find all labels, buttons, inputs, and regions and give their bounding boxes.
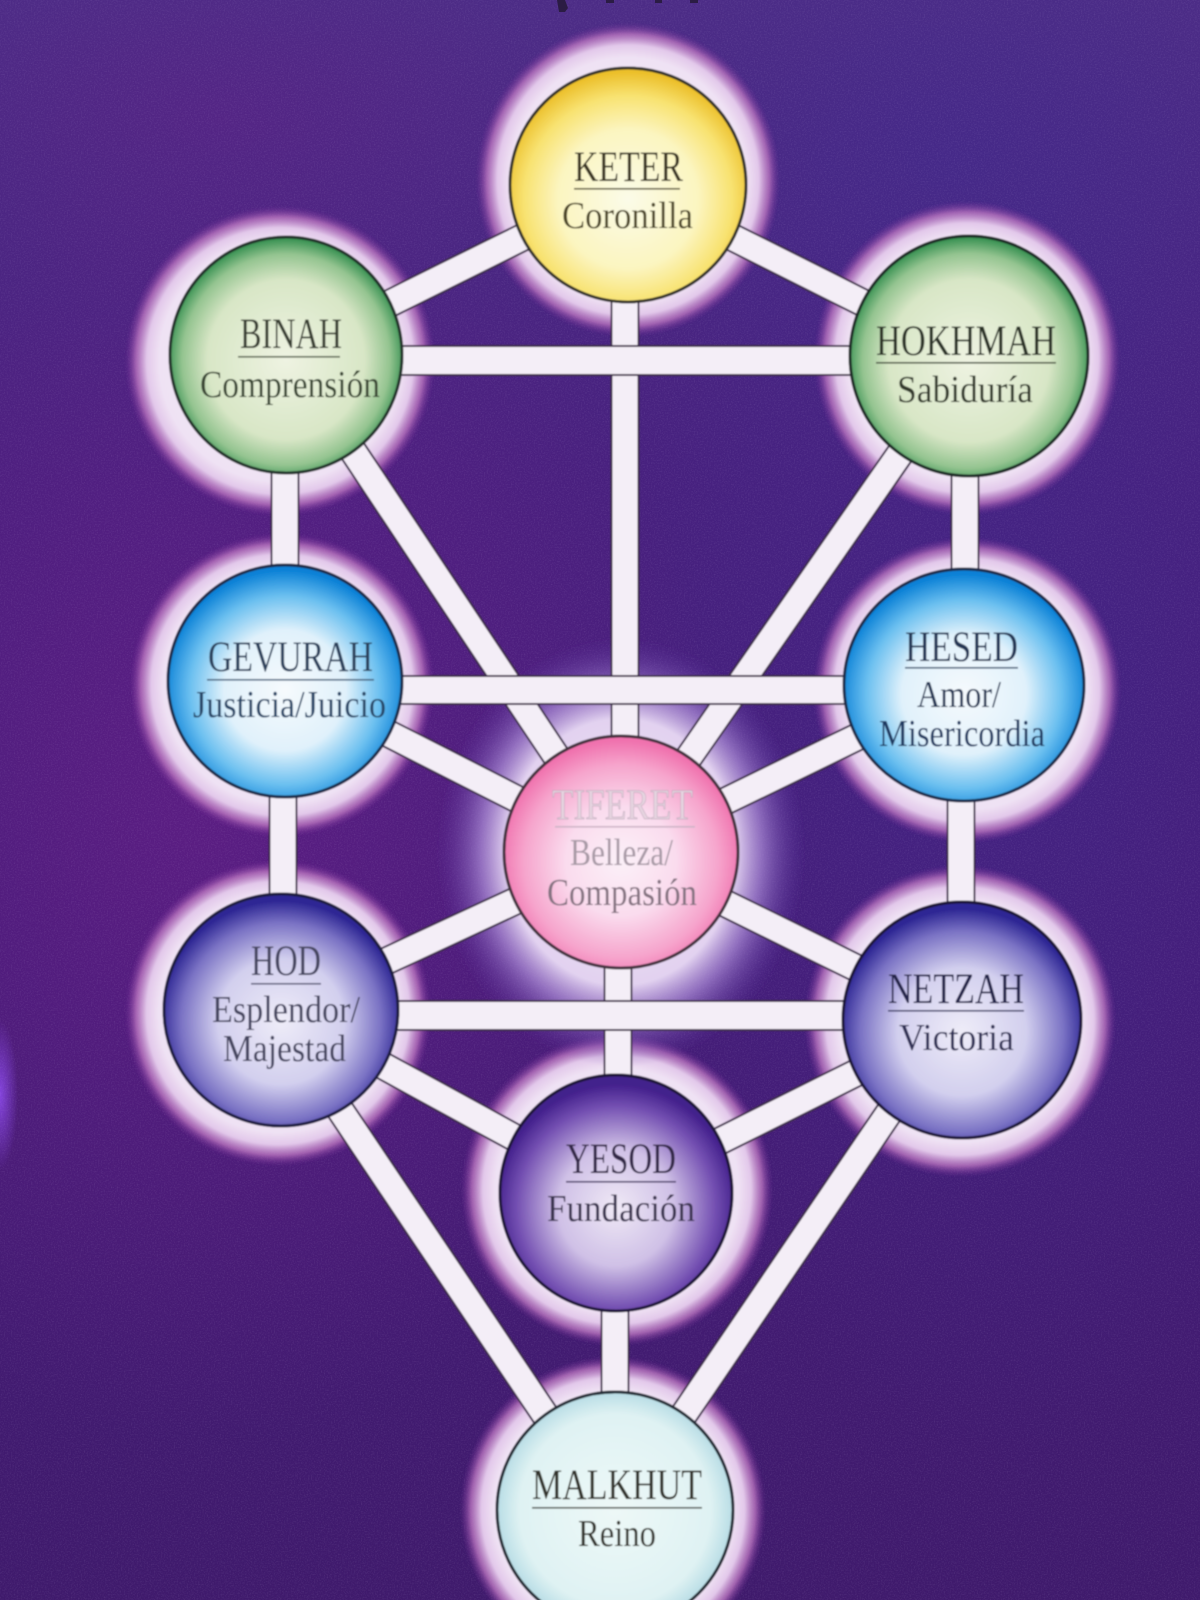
sphere: Hesed: Amor/ xyxy=(917,674,1001,716)
sphere: Hod: Majestad xyxy=(223,1028,346,1070)
sphere: Hesed: HESED xyxy=(905,624,1018,671)
sphere: Keter xyxy=(510,68,746,302)
sphere: Hokhmah: HOKHMAH xyxy=(876,318,1056,365)
sphere: Gevurah: GEVURAH xyxy=(208,634,373,681)
sphere: Yesod: YESOD xyxy=(566,1136,676,1183)
sphere: Hesed xyxy=(844,569,1084,801)
sphere: Binah: Comprensión xyxy=(200,364,380,406)
sphere: Netzah: NETZAH xyxy=(888,966,1024,1013)
sphere: Yesod: Fundación xyxy=(547,1188,695,1230)
horizontal connecting bars xyxy=(350,346,910,1030)
cropped title remnant xyxy=(557,0,698,12)
sphere: Malkhut: Reino xyxy=(578,1513,656,1555)
sphere: Hesed: Misericordia xyxy=(879,713,1045,755)
sphere: Hod: Esplendor/ xyxy=(212,989,360,1031)
sphere: Tiferet: Compasión xyxy=(547,872,697,914)
sphere: Tiferet: TIFERET xyxy=(552,782,693,829)
sphere: Netzah xyxy=(843,902,1081,1138)
sphere: Hod: HOD xyxy=(251,938,321,985)
sphere: Netzah: Victoria xyxy=(899,1017,1014,1059)
sphere: Tiferet: Belleza/ xyxy=(570,832,673,874)
connecting paths: outlines xyxy=(273,185,969,1510)
sphere: Gevurah: Justicia/Juicio xyxy=(193,684,386,726)
sphere: Hokhmah: Sabiduría xyxy=(897,369,1033,411)
sphere: Malkhut xyxy=(497,1392,733,1600)
sphere: Hod xyxy=(164,894,398,1126)
sphere: Malkhut: MALKHUT xyxy=(532,1462,702,1509)
sphere: Keter: Coronilla xyxy=(562,195,693,237)
sphere: Hokhmah xyxy=(850,236,1088,476)
sphere: Binah: BINAH xyxy=(240,311,342,358)
connecting paths: white bars xyxy=(273,185,969,1510)
sphere: Keter: KETER xyxy=(574,144,683,191)
sphere: Binah xyxy=(170,237,402,473)
sphere: Gevurah xyxy=(168,565,402,797)
sphere: Yesod xyxy=(500,1075,732,1311)
sphere: Tiferet xyxy=(504,736,738,968)
